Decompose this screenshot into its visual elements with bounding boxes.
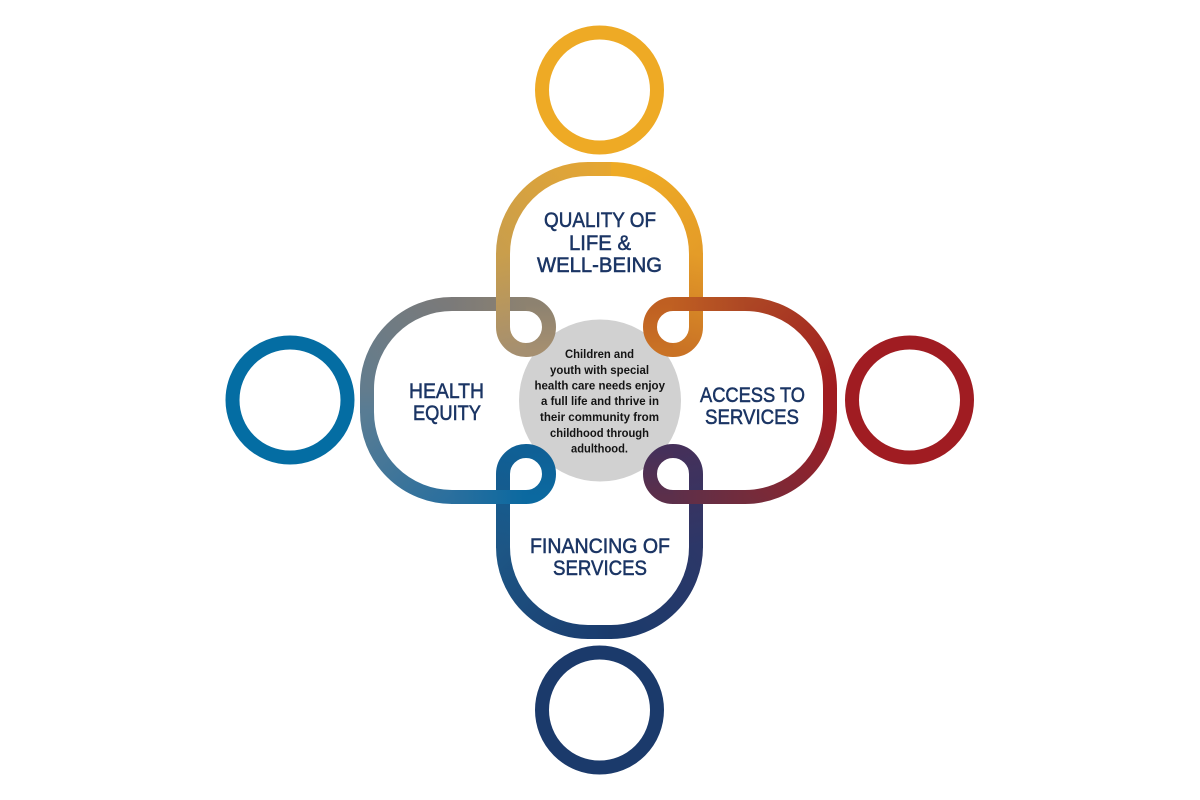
center circle — [519, 320, 681, 482]
center statement text: a full life and thrive in — [541, 394, 659, 408]
heading: quality of life and well-being: WELL-BEING — [537, 253, 662, 277]
center statement text: childhood through — [550, 426, 649, 440]
heading: quality of life and well-being: LIFE & — [569, 231, 631, 255]
heading: health equity: EQUITY — [413, 401, 481, 425]
heading: access to services — [700, 383, 805, 429]
ribbon: financing of services loop — [503, 451, 696, 632]
heading: quality of life and well-being: QUALITY OF — [544, 208, 656, 232]
center statement text: their community from — [540, 410, 659, 424]
heading: access to services: ACCESS TO — [700, 383, 805, 407]
heading: quality of life and well-being — [537, 208, 662, 277]
ribbon: health equity loop — [367, 304, 549, 497]
center statement text: adulthood. — [571, 442, 628, 456]
ribbon: access to services loop — [650, 304, 830, 497]
center statement text — [534, 347, 665, 456]
center statement text: health care needs enjoy — [534, 378, 665, 392]
center statement text: Children and — [565, 347, 634, 361]
heading: health equity — [409, 379, 484, 425]
heading: access to services: SERVICES — [705, 405, 799, 429]
circle: right red head — [852, 342, 967, 458]
center statement text: youth with special — [550, 363, 649, 377]
heading: financing of services — [530, 534, 670, 580]
circle: left blue head — [232, 342, 348, 458]
heading: health equity: HEALTH — [409, 379, 484, 403]
heading: financing of services: SERVICES — [553, 556, 647, 580]
heading: financing of services: FINANCING OF — [530, 534, 670, 558]
ribbon: quality of life loop — [503, 169, 696, 350]
circle: bottom navy head — [542, 652, 657, 768]
circle: top gold head — [542, 32, 657, 148]
